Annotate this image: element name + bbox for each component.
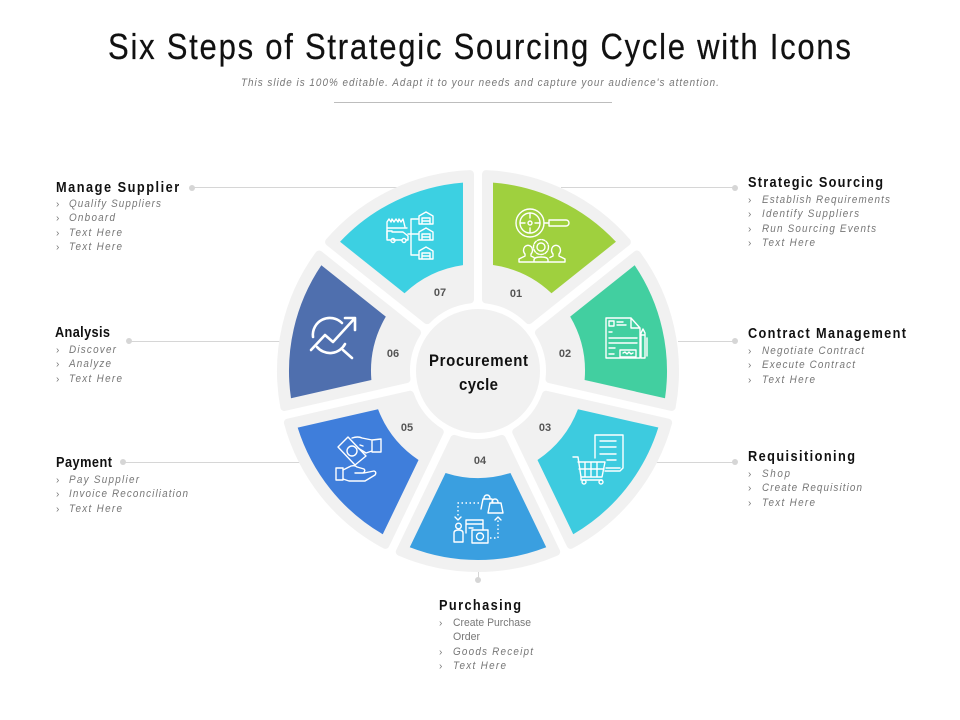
text: Payment: Text Here bbox=[69, 504, 122, 515]
text: Contract Management: › bbox=[748, 360, 751, 371]
icon: magnifier and team bbox=[516, 209, 569, 262]
segment 04: 04 bbox=[474, 455, 487, 467]
icon: contract document bbox=[606, 318, 647, 358]
text: Requisitioning: Text Here bbox=[762, 498, 815, 509]
text: Manage Supplier: › bbox=[56, 199, 59, 210]
text: Purchasing: Create Purchase bbox=[453, 617, 531, 629]
text: Manage Supplier bbox=[56, 179, 180, 253]
segment 03 bbox=[494, 390, 668, 560]
text: Manage Supplier: › bbox=[56, 242, 59, 253]
segment 01 bbox=[486, 174, 627, 320]
text: Strategic Sourcing: › bbox=[748, 238, 751, 249]
text: Strategic Sourcing: › bbox=[748, 209, 751, 220]
text: Analysis: Text Here bbox=[69, 374, 122, 385]
subtitle: This slide is 100% editable. Adapt it to your needs and capture your audience's attention. bbox=[241, 78, 719, 89]
text: Manage Supplier: › bbox=[56, 213, 59, 224]
text: Purchasing: Order bbox=[453, 631, 480, 643]
text: Payment: › bbox=[56, 475, 59, 486]
text: Payment bbox=[56, 454, 188, 515]
text: Analysis: Discover bbox=[69, 345, 116, 356]
segment 06 bbox=[253, 237, 427, 407]
text: Manage Supplier: Onboard bbox=[69, 213, 116, 224]
text: Contract Management: Text Here bbox=[762, 375, 815, 386]
text: Requisitioning: Create Requisition bbox=[762, 483, 862, 494]
text: Strategic Sourcing: Establish Requirements bbox=[762, 195, 891, 206]
text: Requisitioning: Shop bbox=[762, 469, 790, 480]
text: Purchasing: › bbox=[439, 661, 442, 672]
text: Payment: Pay Supplier bbox=[69, 475, 140, 486]
segment 04 bbox=[366, 420, 556, 613]
text: Payment: Payment bbox=[56, 454, 112, 470]
center circle: cycle bbox=[459, 376, 498, 394]
text: Analysis: Analysis bbox=[55, 324, 110, 340]
text: Contract Management: Contract Management bbox=[748, 325, 906, 341]
text: Manage Supplier: Qualify Suppliers bbox=[69, 199, 162, 210]
text: Contract Management: › bbox=[748, 375, 751, 386]
text: Purchasing: › bbox=[439, 647, 442, 658]
text: Payment: Invoice Reconciliation bbox=[69, 489, 188, 500]
text: Analysis bbox=[55, 324, 122, 385]
segment 01: 01 bbox=[510, 288, 522, 300]
text: Contract Management bbox=[748, 325, 906, 386]
text: Strategic Sourcing: Text Here bbox=[762, 238, 815, 249]
text: Requisitioning: › bbox=[748, 469, 751, 480]
text: Strategic Sourcing: Run Sourcing Events bbox=[762, 224, 877, 235]
text: Purchasing bbox=[439, 597, 534, 672]
title: Six Steps of Strategic Sourcing Cycle with Icons bbox=[108, 27, 851, 68]
icon: growth chart with magnifier bbox=[311, 318, 355, 358]
text: Contract Management: Execute Contract bbox=[762, 360, 856, 371]
icon: purchasing flow bbox=[454, 495, 503, 543]
text: Purchasing: Text Here bbox=[453, 661, 506, 672]
text: Requisitioning bbox=[748, 448, 862, 509]
text: Contract Management: Negotiate Contract bbox=[762, 346, 865, 357]
text: Analysis: Analyze bbox=[68, 359, 111, 370]
segment 06: 06 bbox=[387, 348, 399, 360]
text: Manage Supplier: Text Here bbox=[69, 228, 122, 239]
icon: handshake with money bbox=[336, 437, 381, 481]
text: Analysis: › bbox=[56, 345, 59, 356]
text: Strategic Sourcing: › bbox=[748, 195, 751, 206]
text: Analysis: › bbox=[56, 374, 59, 385]
center circle: Procurement bbox=[429, 352, 529, 370]
text: Requisitioning: Requisitioning bbox=[748, 448, 855, 464]
text: Strategic Sourcing: Identify Suppliers bbox=[762, 209, 860, 220]
text: Purchasing: › bbox=[439, 618, 442, 629]
text: Payment: › bbox=[56, 489, 59, 500]
segment 07 bbox=[329, 132, 531, 333]
text: Strategic Sourcing bbox=[748, 174, 891, 249]
text: Requisitioning: › bbox=[748, 483, 751, 494]
text: Manage Supplier: › bbox=[56, 228, 59, 239]
segment 02: 02 bbox=[559, 348, 571, 360]
segment 07: 07 bbox=[434, 287, 446, 299]
text: Purchasing: Goods Receipt bbox=[453, 647, 534, 658]
connector lines bbox=[120, 185, 738, 583]
segment 03: 03 bbox=[539, 422, 551, 434]
text: Purchasing: Purchasing bbox=[439, 597, 521, 613]
text: Analysis: › bbox=[56, 359, 59, 370]
text: Manage Supplier: Text Here bbox=[69, 242, 122, 253]
text: Manage Supplier: Manage Supplier bbox=[56, 179, 180, 195]
text: Payment: › bbox=[56, 504, 59, 515]
center circle bbox=[413, 306, 543, 436]
icon: shopping cart and list bbox=[573, 435, 623, 484]
text: Contract Management: › bbox=[748, 346, 751, 357]
segment 05 bbox=[258, 352, 449, 545]
text: Strategic Sourcing: Strategic Sourcing bbox=[748, 174, 883, 190]
text: Requisitioning: › bbox=[748, 498, 751, 509]
segment 02 bbox=[523, 255, 725, 456]
segment 05: 05 bbox=[401, 422, 413, 434]
text: Strategic Sourcing: › bbox=[748, 224, 751, 235]
icon: factory and warehouses bbox=[387, 212, 433, 259]
